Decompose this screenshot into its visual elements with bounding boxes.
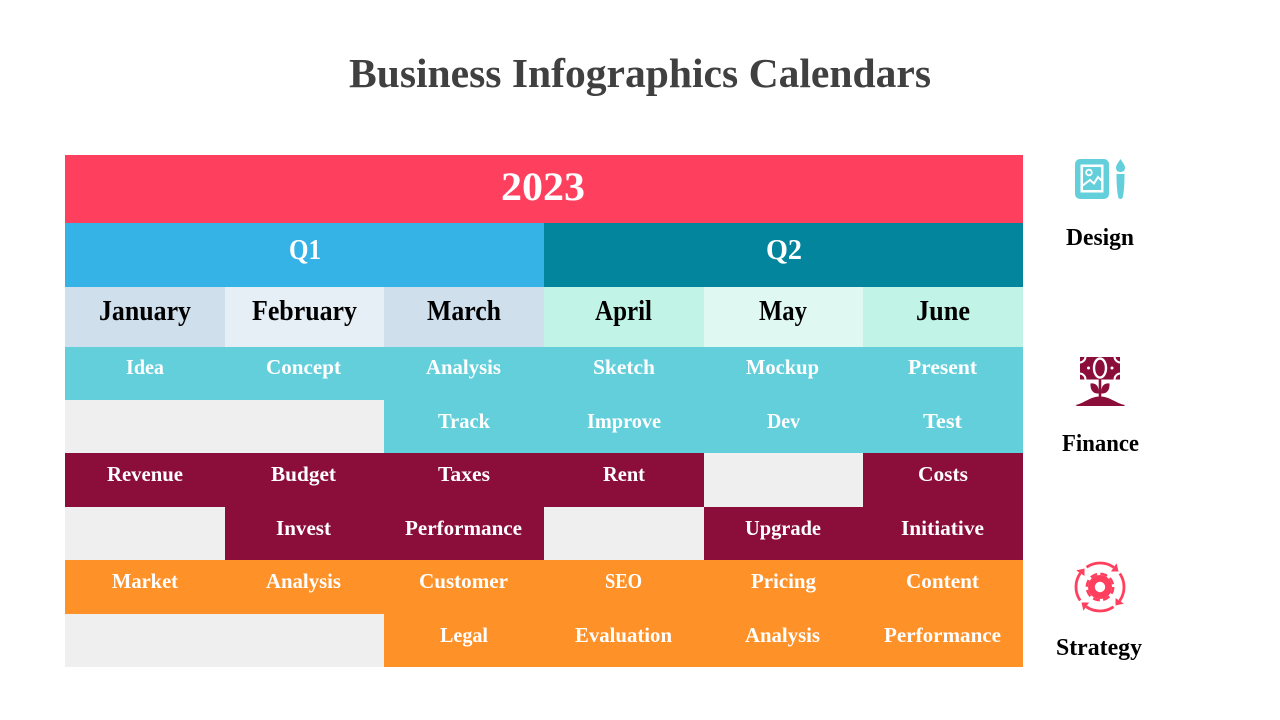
design rows bbox=[65, 347, 1023, 453]
month row: February bbox=[252, 296, 357, 327]
label: Design: Design bbox=[1066, 225, 1134, 251]
strategy rows: Content bbox=[906, 569, 979, 593]
icon: strategy gear with cycle arrows bbox=[1076, 563, 1124, 611]
month row: April bbox=[595, 296, 652, 327]
strategy rows: Legal bbox=[440, 623, 488, 647]
finance rows: Initiative bbox=[901, 516, 984, 540]
icon: design picture and brush bbox=[1075, 159, 1125, 199]
design rows: Idea bbox=[126, 355, 164, 379]
month row: May bbox=[759, 296, 807, 327]
design rows: Improve bbox=[587, 409, 661, 433]
finance rows: Costs bbox=[918, 462, 968, 486]
design rows: Present bbox=[908, 355, 977, 379]
quarter header: Q2 bbox=[544, 223, 1023, 287]
finance rows: Taxes bbox=[438, 462, 490, 486]
panel: calendar table bbox=[65, 155, 1023, 667]
icon: finance banknote plant bbox=[1076, 357, 1125, 406]
strategy rows: Analysis bbox=[266, 569, 341, 593]
label: Strategy: Strategy bbox=[1056, 635, 1142, 661]
finance rows: Upgrade bbox=[745, 516, 821, 540]
strategy rows: Customer bbox=[419, 569, 508, 593]
month row: June bbox=[916, 296, 970, 327]
finance rows: Rent bbox=[603, 462, 645, 486]
design rows: Mockup bbox=[746, 355, 819, 379]
label: Finance: Finance bbox=[1062, 431, 1139, 457]
design rows: Track bbox=[438, 409, 490, 433]
strategy rows: Evaluation bbox=[575, 623, 672, 647]
strategy rows bbox=[65, 560, 1023, 667]
month row: January bbox=[99, 296, 191, 327]
finance rows: Performance bbox=[405, 516, 522, 540]
design rows: Concept bbox=[266, 355, 341, 379]
quarter header: Q1 bbox=[65, 223, 544, 287]
strategy rows: Performance bbox=[884, 623, 1001, 647]
year header: 2023: 2023 bbox=[501, 164, 585, 209]
design rows: Test bbox=[923, 409, 962, 433]
year header: 2023 bbox=[65, 155, 1023, 223]
strategy rows: Market bbox=[112, 569, 178, 593]
strategy rows: Analysis bbox=[745, 623, 820, 647]
design rows: Sketch bbox=[593, 355, 655, 379]
finance rows: Invest bbox=[276, 516, 331, 540]
finance rows: Budget bbox=[271, 462, 336, 486]
quarter header: Q2: Q2 bbox=[766, 234, 802, 266]
strategy rows: Pricing bbox=[751, 569, 816, 593]
strategy rows: SEO bbox=[605, 569, 642, 593]
title: Business Infographics Calendars bbox=[349, 50, 931, 96]
finance rows bbox=[65, 453, 1023, 560]
design rows: Analysis bbox=[426, 355, 501, 379]
month row bbox=[65, 287, 1023, 347]
design rows: Dev bbox=[767, 409, 800, 433]
finance rows: Revenue bbox=[107, 462, 183, 486]
quarter header: Q1: Q1 bbox=[289, 234, 321, 266]
month row: March bbox=[427, 296, 501, 327]
